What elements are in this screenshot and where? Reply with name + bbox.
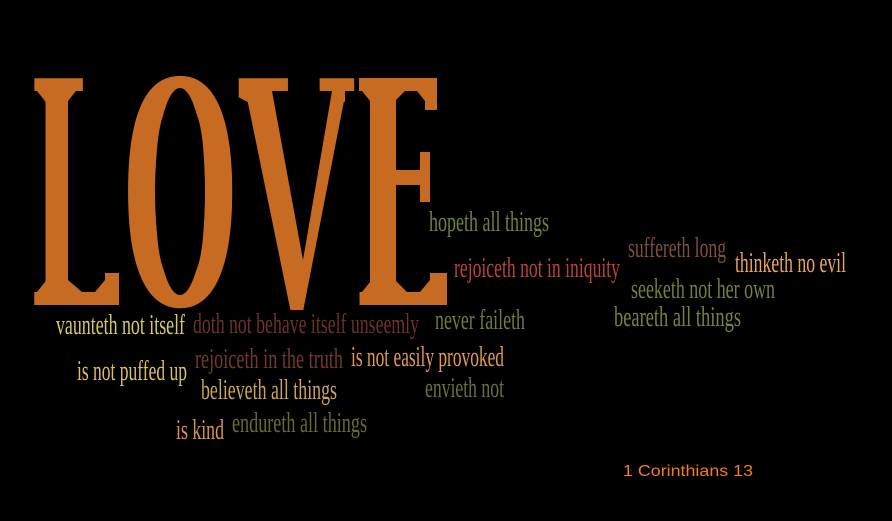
title: LOVE: E [359, 5, 452, 374]
title: LOVE: V [239, 4, 354, 374]
title: LOVE: O [123, 4, 238, 373]
phrase: never faileth: never faileth [435, 305, 525, 336]
phrase: vaunteth not itself: vaunteth not itself [56, 310, 185, 341]
phrase: is not easily provoked: is not easily provoked [351, 342, 504, 373]
phrase: believeth all things: believeth all things [201, 375, 337, 406]
phrase: envieth not: envieth not [425, 373, 504, 404]
phrase: doth not behave itself unseemly: doth not behave itself unseemly [193, 309, 419, 340]
phrase: suffereth long: suffereth long [628, 233, 726, 264]
citation: 1 Corinthians 13: 1 Corinthians 13 [623, 463, 753, 480]
phrase: beareth all things: beareth all things [614, 302, 741, 333]
phrase: endureth all things: endureth all things [232, 408, 367, 439]
phrase: is not puffed up: is not puffed up [77, 356, 187, 387]
title: LOVE [30, 4, 452, 375]
phrase: rejoiceth not in iniquity: rejoiceth not in iniquity [454, 253, 620, 284]
word cloud: attributes of love [56, 207, 846, 446]
phrase: rejoiceth in the truth: rejoiceth in the truth [195, 344, 343, 375]
phrase: seeketh not her own: seeketh not her own [631, 274, 775, 305]
title: LOVE: L [34, 4, 123, 375]
phrase: is kind: is kind [176, 415, 224, 446]
phrase: hopeth all things: hopeth all things [429, 207, 549, 238]
